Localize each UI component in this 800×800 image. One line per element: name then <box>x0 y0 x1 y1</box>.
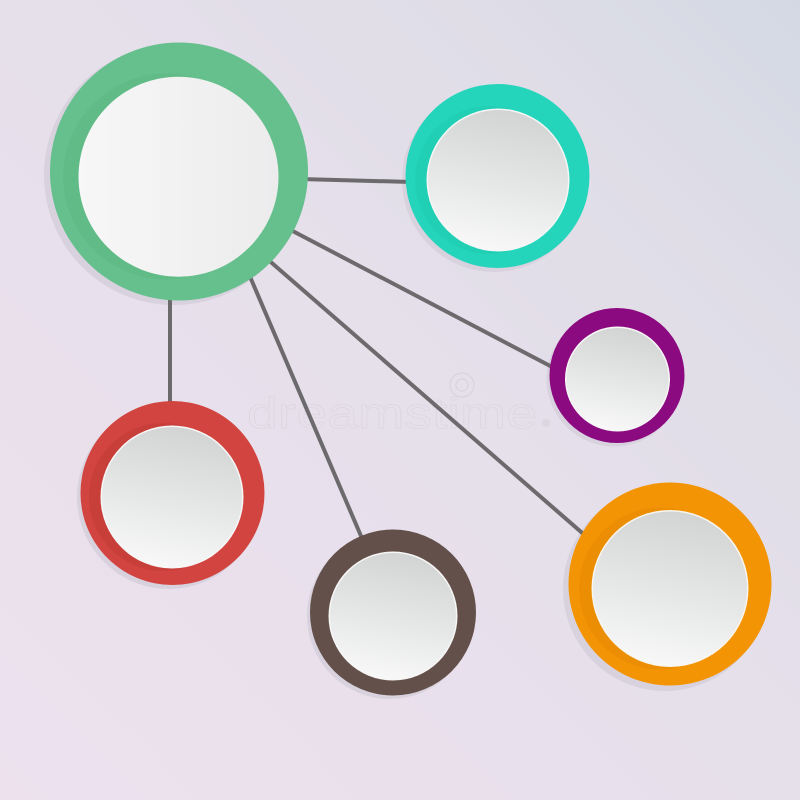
watermark: dreamstime <box>247 389 537 438</box>
connector lines <box>170 179 588 543</box>
watermark <box>247 373 550 438</box>
node: teal circle <box>406 84 590 268</box>
node shadows <box>44 45 767 699</box>
node: orange circle <box>568 482 772 686</box>
node: brown circle <box>310 530 476 696</box>
node: green main circle <box>50 42 308 300</box>
node: purple circle <box>550 308 684 443</box>
node: red circle <box>80 401 264 585</box>
